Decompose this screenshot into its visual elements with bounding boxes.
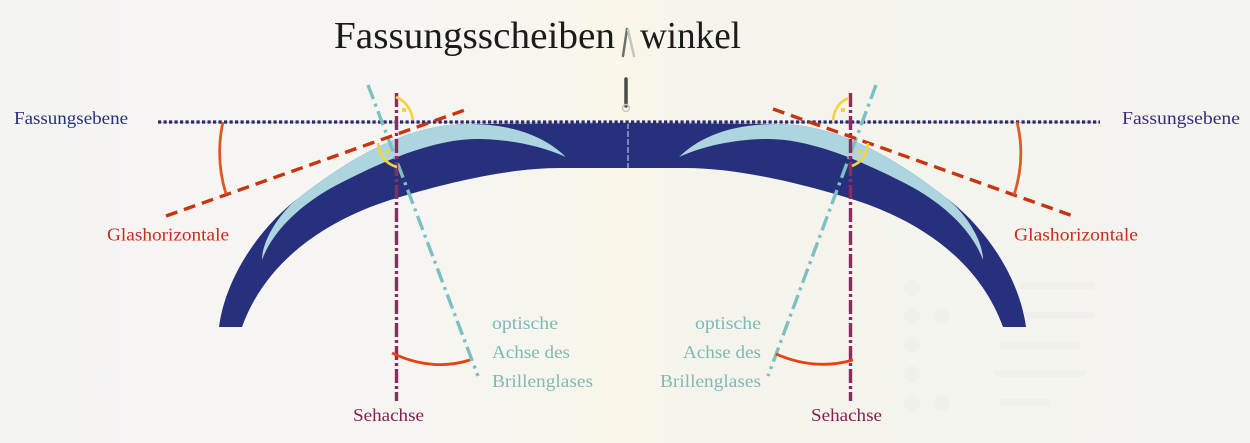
bridge seam xyxy=(627,123,629,168)
left optical axis xyxy=(368,85,478,376)
title xyxy=(334,15,741,57)
lower right marker xyxy=(852,143,868,166)
title: Fassungsscheiben xyxy=(334,15,615,57)
left frame half xyxy=(219,123,628,327)
right optical axis xyxy=(768,85,876,376)
right glass horizontal xyxy=(773,109,1073,216)
left lens xyxy=(262,124,566,260)
label: Glashorizontale left: Glashorizontale xyxy=(107,224,229,244)
label: optische Achse des Brillenglases right: Brillenglases xyxy=(660,371,761,391)
frame plane line xyxy=(158,121,1100,124)
spectacle frame xyxy=(219,123,1026,327)
left glass horizontal xyxy=(166,110,465,216)
label: optische Achse des Brillenglases right: optische xyxy=(695,313,761,333)
lower left marker xyxy=(378,143,397,167)
label: optische Achse des Brillenglases left: Achse des xyxy=(492,342,570,362)
label: Sehachse right: Sehachse xyxy=(811,405,882,425)
marker dots xyxy=(386,110,861,152)
upper left marker xyxy=(396,97,413,120)
left axis angle arc xyxy=(392,353,470,365)
label: Glashorizontale right: Glashorizontale xyxy=(1014,224,1138,244)
label: optische Achse des Brillenglases right: Achse des xyxy=(683,342,761,362)
label: Sehachse left: Sehachse xyxy=(353,405,424,425)
right-angle markers xyxy=(378,97,868,167)
right frame angle arc xyxy=(1014,122,1021,195)
right frame half xyxy=(627,123,1026,327)
label: Fassungsebene right: Fassungsebene xyxy=(1122,108,1240,128)
right lens xyxy=(679,124,983,260)
label: Fassungsebene left: Fassungsebene xyxy=(14,108,128,128)
right axis angle arc xyxy=(776,354,853,364)
left frame angle arc xyxy=(220,122,226,194)
label: optische Achse des Brillenglases right xyxy=(660,313,761,391)
left visual axis xyxy=(395,93,398,401)
label: optische Achse des Brillenglases left: Brillenglases xyxy=(492,371,593,391)
label: optische Achse des Brillenglases left xyxy=(492,313,593,391)
title: winkel xyxy=(640,15,741,57)
upper right marker xyxy=(833,98,849,120)
right visual axis xyxy=(849,93,852,401)
staple marks xyxy=(622,29,634,112)
label: optische Achse des Brillenglases left: optische xyxy=(492,313,558,333)
